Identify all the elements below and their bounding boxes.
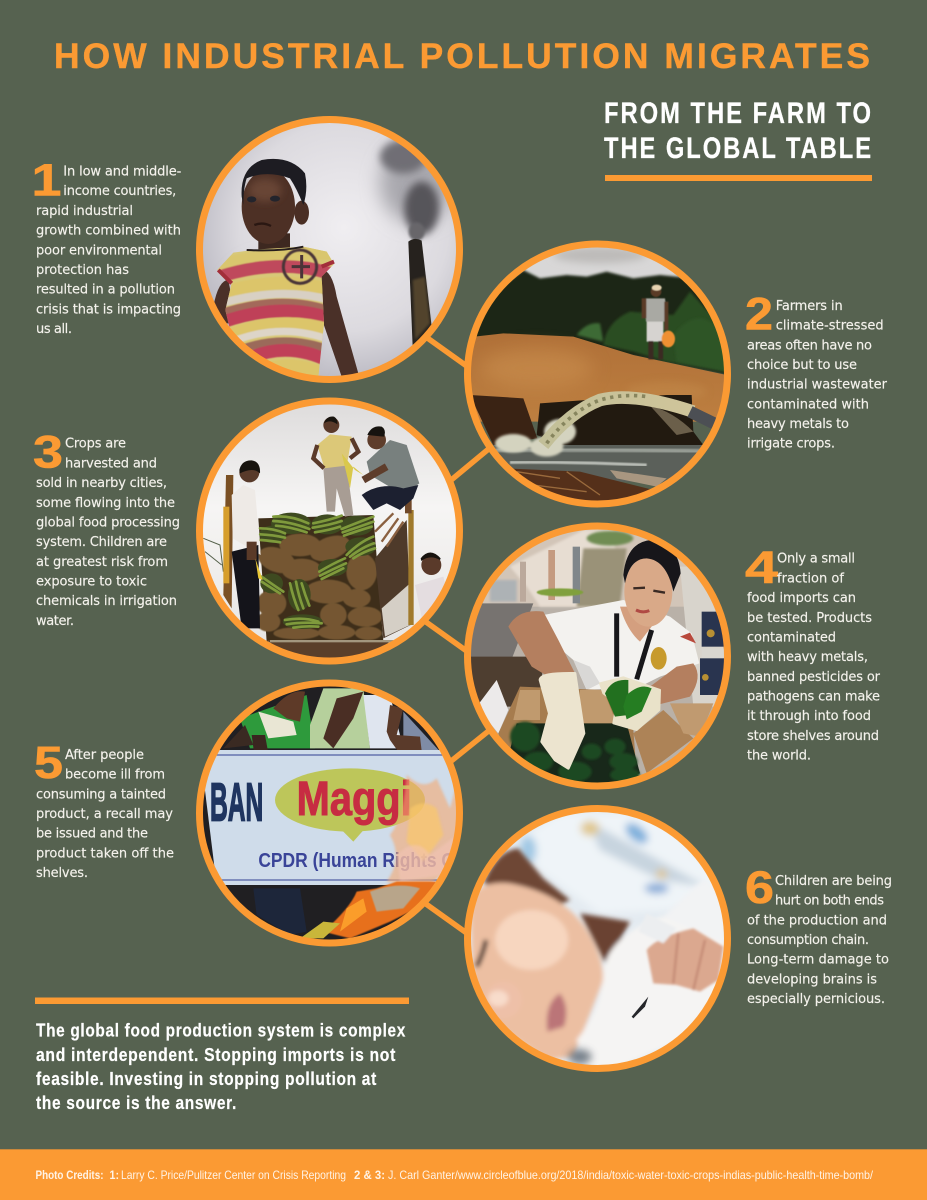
subtitle (604, 97, 873, 165)
text block 2: 2 (745, 288, 773, 340)
text block 6: especially pernicious. (747, 992, 885, 1007)
text block 2 (745, 288, 888, 452)
text block 4: Only a small (777, 552, 855, 567)
text block 4: 4 (745, 542, 778, 593)
text block 4: be tested. Products (747, 611, 872, 626)
photo 6: sleeping sick baby (460, 800, 740, 1080)
connectors between photos (426, 337, 491, 934)
text block 5: consuming a tainted (36, 787, 166, 802)
text block 6: Children are being (775, 874, 892, 889)
footer bar: photo credits: 2 & 3: (354, 1168, 385, 1182)
text block 3: exposure to toxic (36, 574, 147, 590)
text block 1: poor environmental (36, 243, 162, 258)
footer bar: photo credits: Photo Credits: (36, 1168, 104, 1182)
text block 5: product, a recall may (36, 807, 173, 822)
footer bar: photo credits: J. Carl Ganter/www.circleofblue.org/2018/india/toxic-water-toxic-crops-indias-public-health-time-bomb/ (388, 1168, 874, 1182)
text block 1: protection has (36, 263, 129, 278)
text block 5: be issued and the (36, 827, 148, 842)
text block 3: harvested and (65, 456, 157, 471)
conclusion text: The global food production system is complex (36, 1020, 406, 1041)
conclusion text: the source is the answer. (36, 1092, 237, 1113)
text block 1: resulted in a pollution (36, 283, 175, 298)
text block 3: at greatest risk from (36, 555, 168, 570)
conclusion text: and interdependent. Stopping imports is not (36, 1044, 396, 1065)
subtitle rule (605, 175, 872, 181)
text block 3: some flowing into the (36, 496, 175, 511)
text block 1: growth combined with (36, 224, 181, 239)
text block 1: income countries, (63, 184, 176, 199)
text block 3: chemicals in irrigation (36, 594, 177, 609)
text block 4: store shelves around (747, 729, 879, 744)
text block 4 (745, 542, 881, 764)
text block 5: become ill from (65, 768, 165, 783)
text block 1: 1 (32, 154, 62, 206)
photo 2: irrigation with wastewater (460, 235, 740, 515)
text block 1 (32, 154, 182, 337)
footer bar: photo credits: Larry C. Price/Pulitzer Center on Crisis Reporting (121, 1168, 346, 1182)
conclusion rule (35, 998, 409, 1004)
text block 2: heavy metals to (747, 417, 849, 432)
text block 2: choice but to use (747, 358, 857, 373)
text block 5 (34, 737, 174, 881)
photo 5: Ban Maggi protest banner with flames: CPDR (Human Rights O (258, 849, 455, 872)
text block 6 (745, 862, 892, 1007)
text block 2: irrigate crops. (747, 437, 835, 452)
photo 5: Ban Maggi protest banner with flames: BAN (210, 773, 263, 832)
text block 5: product taken off the (36, 846, 174, 861)
text block 4: it through into food (747, 709, 871, 724)
text block 4: contaminated (747, 630, 836, 646)
text block 3: global food processing (36, 516, 180, 530)
footer bar: photo credits (0, 1149, 927, 1200)
text block 2: climate-stressed (776, 319, 884, 334)
text block 3: water. (36, 614, 74, 629)
text block 1: crisis that is impacting (36, 302, 181, 317)
text block 6: consumption chain. (747, 933, 869, 948)
text block 3: system. Children are (36, 535, 167, 550)
text block 6: 6 (745, 862, 774, 913)
text block 6: Long-term damage to (747, 953, 889, 968)
text block 3: sold in nearby cities, (36, 476, 167, 491)
text block 2: industrial wastewater (747, 378, 888, 393)
text block 6: hurt on both ends (775, 894, 884, 909)
text block 4: pathogens can make (747, 690, 880, 704)
photo 4: inspector checking green peppers (460, 520, 740, 800)
photo 5: Ban Maggi protest banner with flames (190, 675, 470, 955)
text block 5: After people (65, 748, 144, 763)
title: HOW INDUSTRIAL POLLUTION MIGRATES (54, 37, 873, 76)
text block 1: rapid industrial (36, 204, 133, 219)
text block 4: with heavy metals, (747, 650, 868, 665)
conclusion text (36, 1020, 406, 1113)
text block 4: fraction of (777, 571, 844, 586)
photo 1: child and smokestack (190, 110, 470, 390)
text block 4: banned pesticides or (747, 670, 881, 685)
footer bar: photo credits: 1: (110, 1168, 119, 1182)
text block 3: 3 (33, 426, 63, 478)
text block 3 (33, 426, 180, 629)
text block 6: of the production and (747, 913, 887, 928)
text block 4: food imports can (747, 591, 856, 606)
text block 5: 5 (34, 737, 63, 788)
text block 1: In low and middle- (63, 164, 182, 180)
conclusion text: feasible. Investing in stopping pollution at (36, 1068, 377, 1089)
text block 6: developing brains is (747, 972, 877, 987)
text block 5: shelves. (36, 866, 88, 881)
photo 5: Ban Maggi protest banner with flames: Maggi (297, 772, 412, 826)
text block 2: areas often have no (747, 338, 872, 353)
text block 2: Farmers in (776, 299, 843, 314)
text block 3: Crops are (65, 437, 126, 452)
photo 3: crops loaded on a truck (190, 395, 470, 675)
text block 2: contaminated with (747, 397, 869, 412)
text block 1: us all. (36, 322, 72, 337)
text block 4: the world. (747, 749, 811, 764)
